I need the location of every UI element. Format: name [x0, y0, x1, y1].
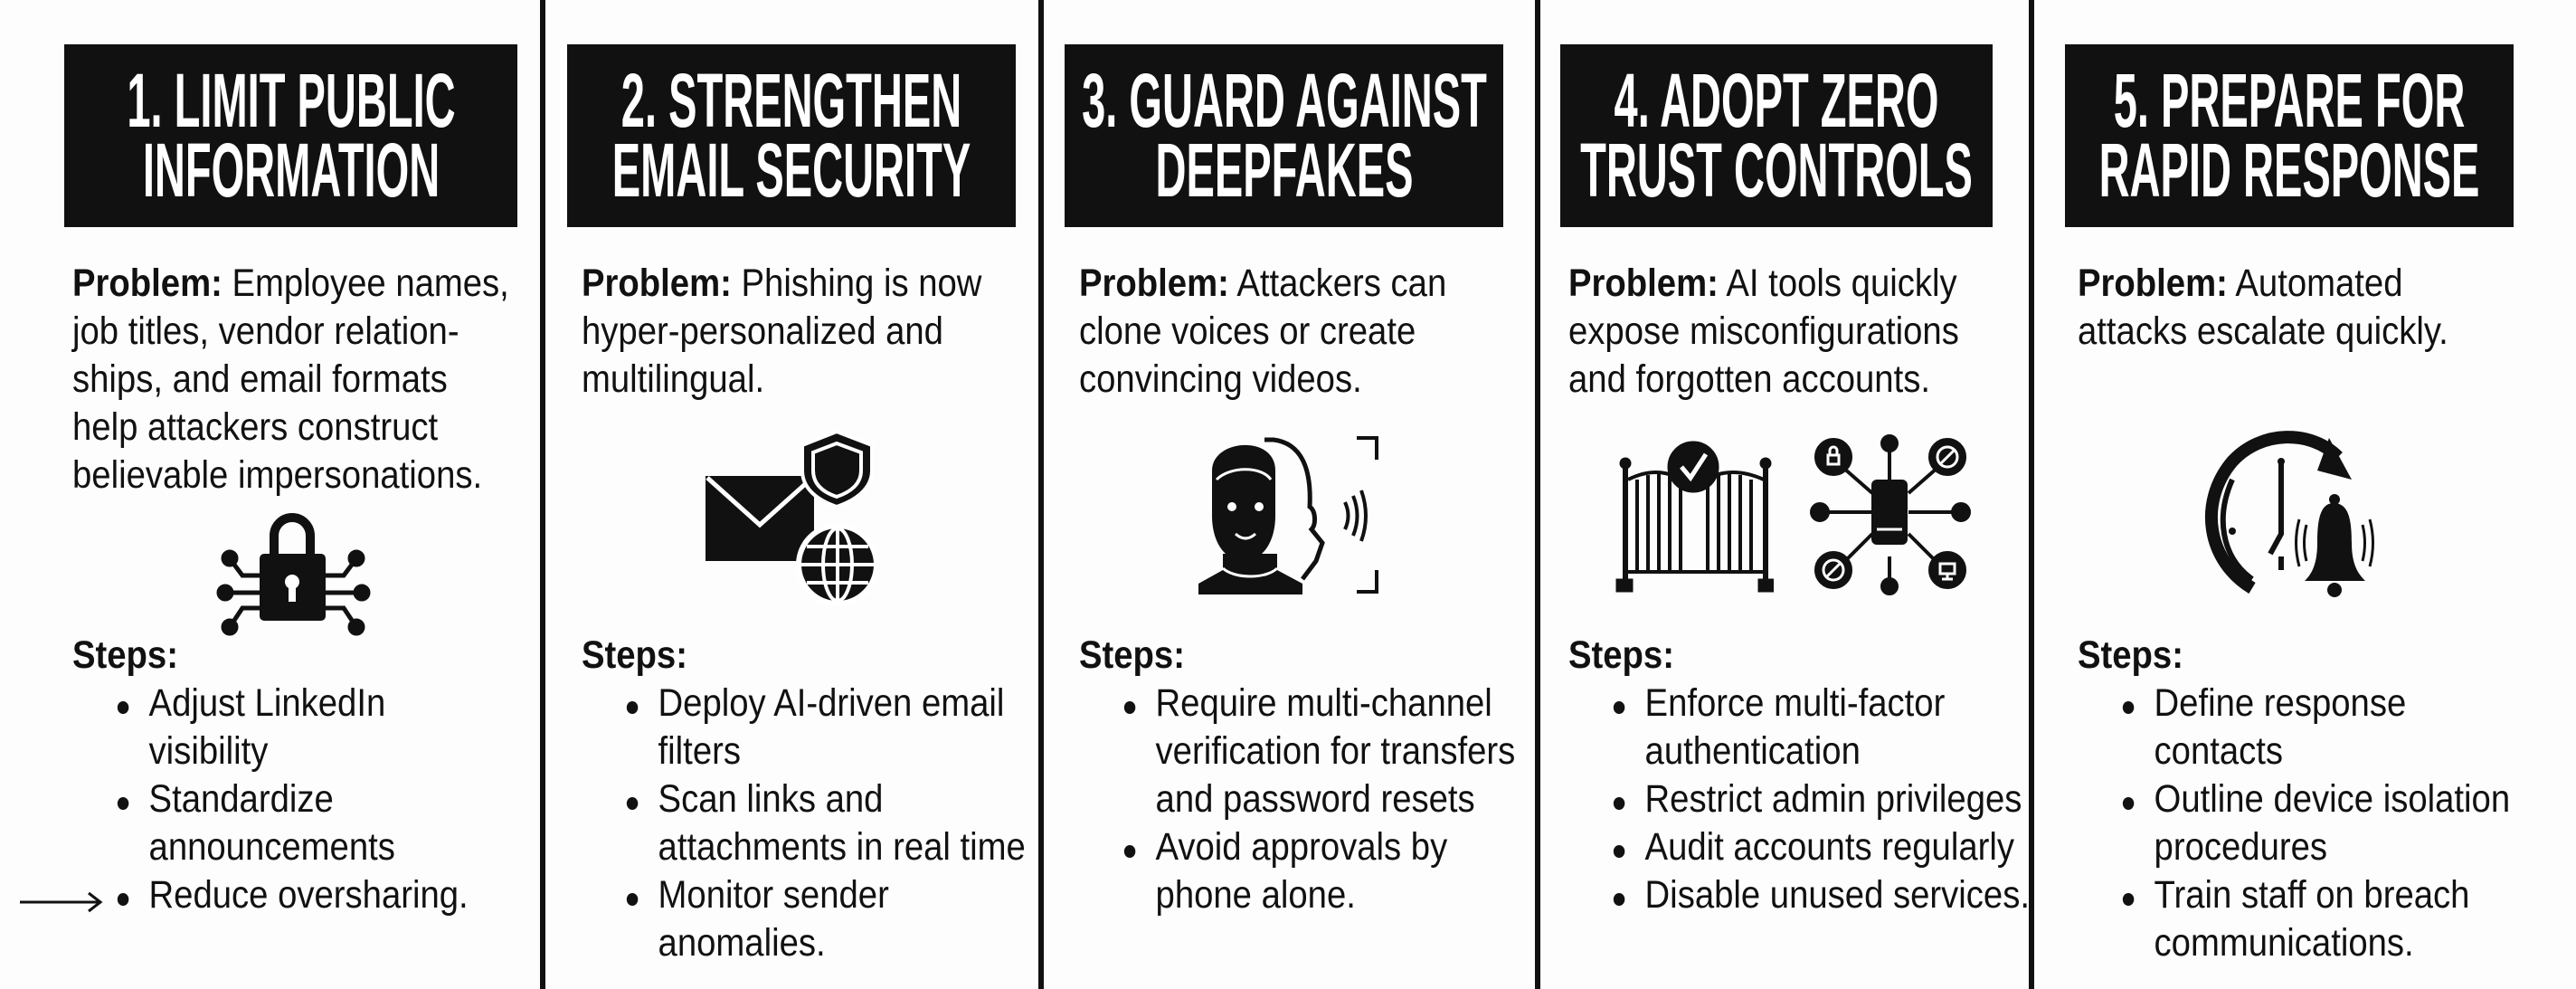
problem text 1: Problem: Employee names,: [72, 262, 509, 305]
panel 5: prepare for rapid response: [2065, 44, 2514, 965]
steps 4: [1568, 633, 2030, 917]
problem text 4: Problem: AI tools quickly: [1568, 262, 1957, 305]
panel 3: guard against deepfakes: [1065, 44, 1515, 917]
problem text 3: convincing videos.: [1079, 357, 1362, 401]
steps 5: [2078, 633, 2510, 965]
panel 4: adopt zero trust controls: [1560, 44, 2030, 917]
steps 5: Define response: [2155, 681, 2406, 725]
heading 3: DEEPFAKES: [1155, 128, 1413, 213]
problem text 4: and forgotten accounts.: [1568, 357, 1930, 401]
steps 3: Require multi-channel: [1156, 681, 1492, 725]
steps 1: Steps:: [72, 633, 178, 677]
heading 4: TRUST CONTROLS: [1580, 128, 1973, 213]
steps 3: verification for transfers: [1156, 729, 1515, 773]
problem text 3: [1079, 262, 1446, 401]
heading 1: INFORMATION: [142, 128, 440, 213]
panel 1: limit public information: [20, 44, 517, 917]
heading 3: [1065, 44, 1503, 227]
steps 2: anomalies.: [658, 921, 826, 965]
problem text 3: Problem: Attackers can: [1079, 262, 1446, 305]
steps 2: attachments in real time: [658, 825, 1026, 869]
steps 4: Restrict admin privileges: [1645, 777, 2022, 821]
steps 2: Steps:: [582, 633, 687, 677]
steps 3: phone alone.: [1156, 873, 1356, 917]
heading 2: [567, 44, 1016, 227]
icon: clock with alarm bell: [2205, 431, 2374, 597]
steps 4: authentication: [1645, 729, 1861, 773]
problem text 5: attacks escalate quickly.: [2078, 309, 2448, 353]
icon: face with voice clone: [1198, 436, 1378, 594]
icon: network with device: [1810, 434, 1971, 595]
steps 5: contacts: [2155, 729, 2283, 773]
problem text 1: believable impersonations.: [72, 453, 482, 497]
heading 1: 1. LIMIT PUBLIC: [127, 58, 455, 143]
steps 2: Monitor sender: [658, 873, 889, 917]
problem text 1: help attackers construct: [72, 405, 438, 449]
steps 1: Reduce oversharing.: [149, 873, 469, 917]
heading 2: 2. STRENGTHEN: [621, 58, 961, 143]
problem text 4: expose misconfigurations: [1568, 309, 1959, 353]
steps 5: Train staff on breach: [2155, 873, 2469, 917]
problem text 4: [1568, 262, 1959, 401]
heading 5: RAPID RESPONSE: [2099, 128, 2479, 213]
steps 1: Standardize: [149, 777, 334, 821]
icon: gate with check: [1615, 442, 1774, 592]
steps 4: Audit accounts regularly: [1645, 825, 2014, 869]
steps 2: filters: [658, 729, 741, 773]
steps 1: Adjust LinkedIn: [149, 681, 385, 725]
steps 3: Steps:: [1079, 633, 1185, 677]
problem text 5: [2078, 262, 2448, 353]
icon: circuit lock: [217, 513, 371, 635]
steps 4: Enforce multi-factor: [1645, 681, 1945, 725]
steps 5: Outline device isolation: [2155, 777, 2510, 821]
problem text 1: [71, 262, 509, 497]
arrow: [20, 892, 103, 912]
problem text 2: [582, 262, 982, 401]
steps 2: Scan links and: [658, 777, 883, 821]
steps 3: Avoid approvals by: [1156, 825, 1447, 869]
steps 2: Deploy AI-driven email: [658, 681, 1004, 725]
heading 5: 5. PREPARE FOR: [2114, 58, 2465, 143]
steps 1: visibility: [149, 729, 268, 773]
problem text 5: Problem: Automated: [2078, 262, 2402, 305]
steps 4: Disable unused services.: [1645, 873, 2030, 917]
icon: envelope shield globe: [706, 433, 874, 601]
steps 5: communications.: [2155, 921, 2414, 965]
steps 4: Steps:: [1568, 633, 1674, 677]
steps 3: and password resets: [1156, 777, 1475, 821]
problem text 3: clone voices or create: [1079, 309, 1416, 353]
steps 5: procedures: [2155, 825, 2327, 869]
problem text 1: job titles, vendor relation-: [72, 309, 459, 353]
problem text 2: hyper-personalized and: [582, 309, 943, 353]
steps 1: announcements: [149, 825, 395, 869]
steps 3: [1079, 633, 1515, 917]
problem text 1: ships, and email formats: [72, 357, 448, 401]
heading 3: 3. GUARD AGAINST: [1082, 58, 1486, 143]
heading 1: [64, 44, 517, 227]
steps 2: [582, 633, 1026, 965]
problem text 2: multilingual.: [582, 357, 764, 401]
heading 2: EMAIL SECURITY: [612, 128, 971, 213]
steps 1: [72, 633, 469, 917]
problem text 2: Problem: Phishing is now: [582, 262, 981, 305]
heading 5: [2065, 44, 2514, 227]
heading 4: 4. ADOPT ZERO: [1615, 58, 1938, 143]
steps 5: Steps:: [2078, 633, 2183, 677]
panel 2: strengthen email security: [567, 44, 1026, 965]
heading 4: [1560, 44, 1993, 227]
